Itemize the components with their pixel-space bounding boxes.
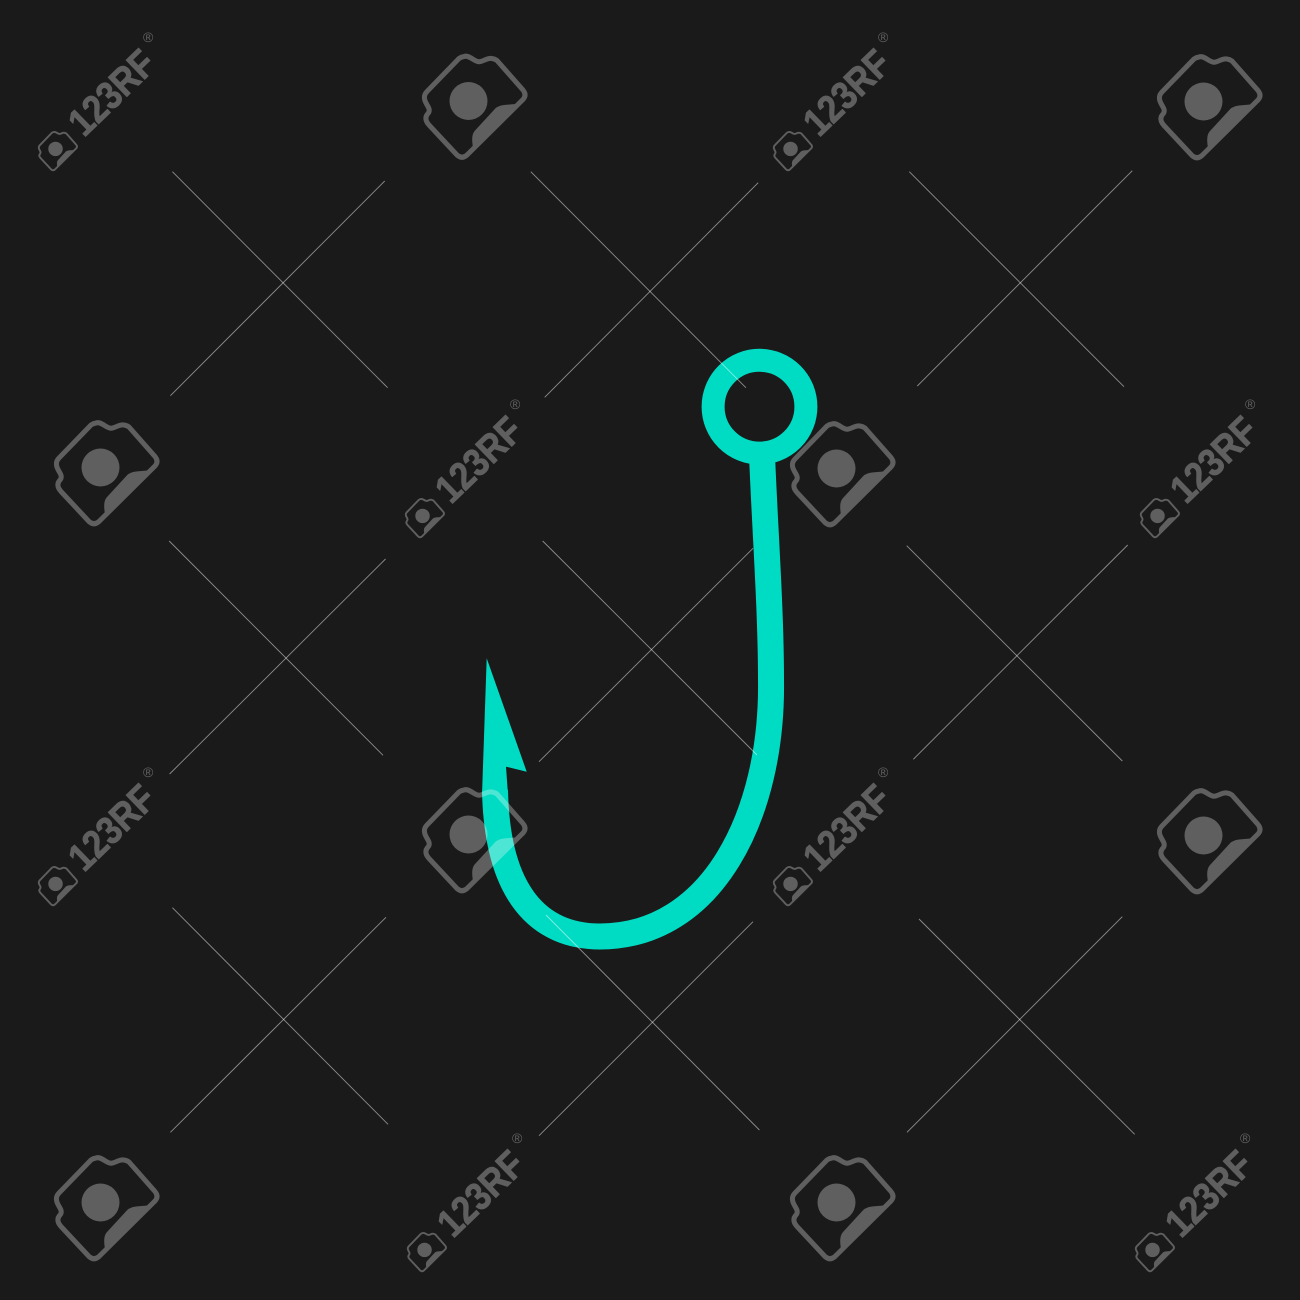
watermark wordmark: row 2 column 4: ®: [1245, 396, 1256, 412]
watermark wordmark: row 2 column 4: [1141, 396, 1266, 537]
hook barb: [482, 658, 527, 795]
watermark wordmark: row 3 column 3: ®: [878, 764, 889, 780]
watermark wordmark: row 1 column 1: [39, 29, 164, 170]
watermark wordmark: row 3 column 1: 123RF: [60, 777, 164, 879]
watermark logo: row 3 column 2: [424, 790, 525, 891]
hook eye ring: [713, 360, 806, 453]
watermark wordmark: row 3 column 3: [774, 764, 899, 905]
watermark wordmark: row 2 column 2: ®: [510, 396, 521, 412]
watermark wordmark: row 3 column 1: ®: [143, 764, 154, 780]
watermark wordmark: row 4 column 2: 123RF: [429, 1143, 533, 1245]
watermark logo: row 1 column 2: [424, 56, 525, 157]
icon: fishing hook: [482, 360, 806, 936]
watermark wordmark: row 2 column 2: 123RF: [427, 409, 531, 511]
watermark logo: row 3 column 4: [1159, 791, 1260, 892]
watermark wordmark: row 4 column 4: 123RF: [1157, 1143, 1261, 1245]
watermark logo: row 2 column 3: [792, 424, 893, 525]
watermark wordmark: row 1 column 3: 123RF: [795, 42, 899, 144]
watermark wordmark: row 2 column 2: [406, 396, 531, 537]
watermark logo: row 1 column 4: [1159, 57, 1260, 158]
watermark wordmark: row 3 column 1: [39, 764, 164, 905]
watermark logo: row 4 column 1: [56, 1158, 157, 1259]
watermark logo: row 4 column 3: [792, 1158, 893, 1259]
watermark wordmark: row 4 column 4: ®: [1240, 1130, 1251, 1146]
watermark wordmark: row 1 column 3: [774, 29, 899, 170]
watermark wordmark: row 4 column 2: [408, 1130, 533, 1271]
watermark wordmark: row 1 column 1: 123RF: [60, 42, 164, 144]
watermark logo: row 2 column 1: [56, 423, 157, 524]
watermark wordmark: row 1 column 1: ®: [143, 29, 154, 45]
watermark wordmark: row 3 column 3: 123RF: [795, 777, 899, 879]
watermark wordmark: row 1 column 3: ®: [878, 29, 889, 45]
watermark wordmark: row 4 column 4: [1136, 1130, 1261, 1271]
watermark wordmark: row 2 column 4: 123RF: [1162, 409, 1266, 511]
watermark wordmark: row 4 column 2: ®: [512, 1130, 523, 1146]
